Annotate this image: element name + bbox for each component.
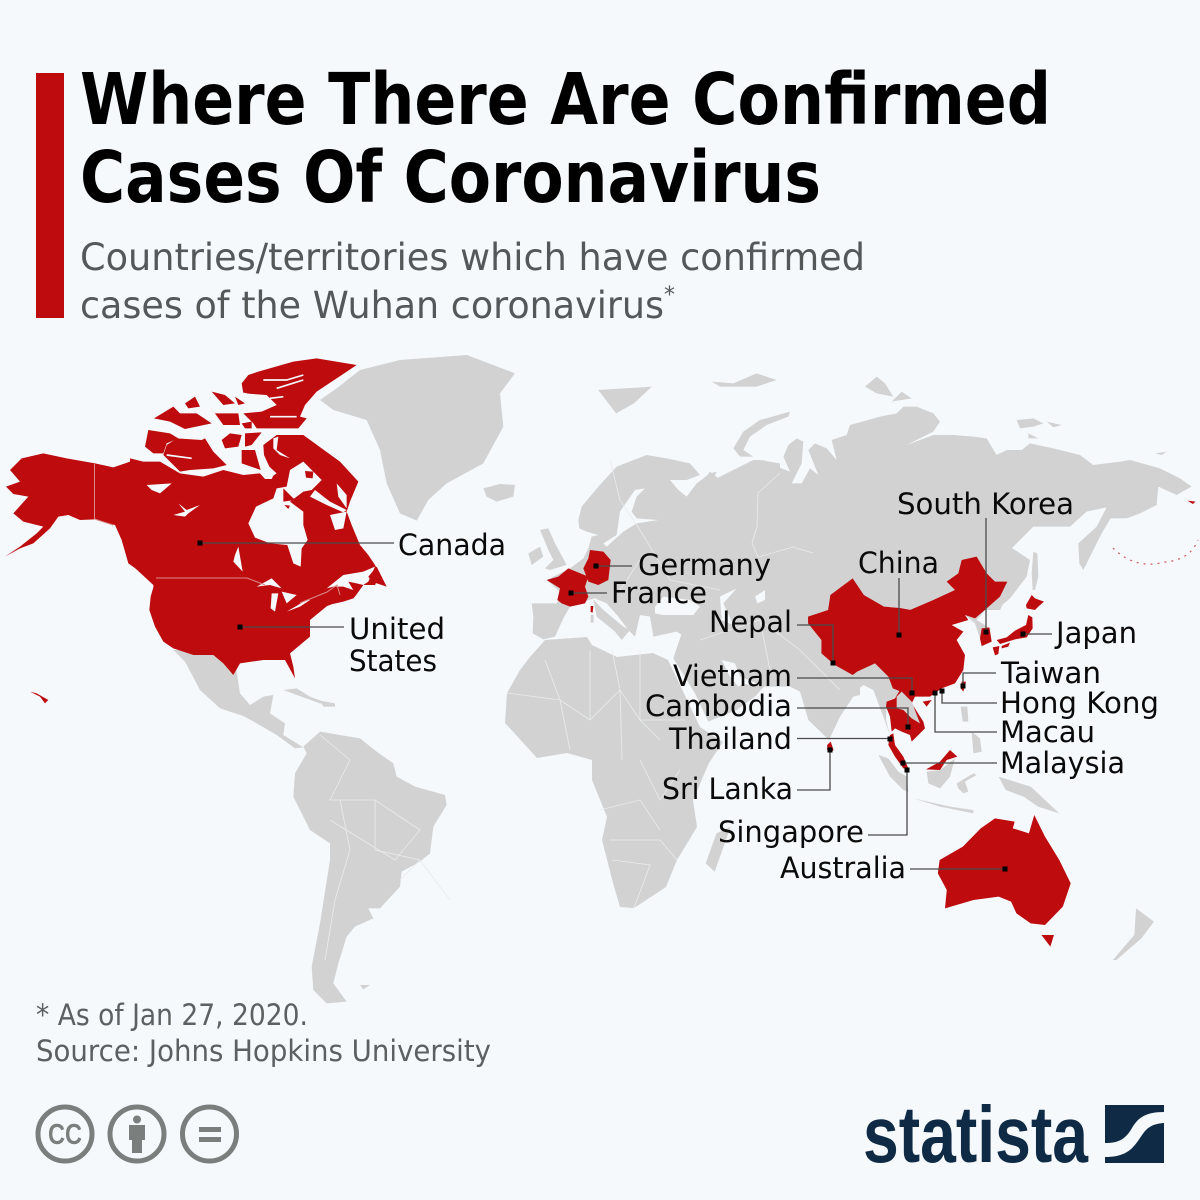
logo: statista: statista <box>863 1090 1088 1179</box>
label: United States: United <box>349 612 445 646</box>
label: Vietnam: Vietnam <box>673 659 792 693</box>
country borders <box>320 460 840 960</box>
lakes and gulfs of Canada <box>147 375 387 612</box>
footnote and source: Source: Johns Hopkins University <box>36 1034 491 1068</box>
label: South Korea <box>897 487 1074 634</box>
subtitle <box>80 236 865 327</box>
label: Vietnam <box>673 659 914 696</box>
highlighted: Sri Lanka and Australia <box>827 742 1071 947</box>
land: Myanmar and mainland Southeast Asia <box>840 660 982 813</box>
label: Australia <box>780 851 1008 885</box>
land: Russia <box>700 373 1192 610</box>
label: China: China <box>858 546 939 580</box>
label: France: France <box>611 576 707 610</box>
label: United States: States <box>349 644 437 678</box>
highlighted: France, Germany, Corsica <box>547 550 611 613</box>
label: Hong Kong: Hong Kong <box>1000 686 1159 720</box>
label: Thailand: Thailand <box>668 722 792 756</box>
highlighted: Indochina, Malaysia, Hainan <box>886 688 957 770</box>
footnote and source: * As of Jan 27, 2020. <box>36 998 308 1032</box>
icon: no derivatives <box>182 1107 236 1161</box>
land: Mexico and Central America <box>173 650 335 748</box>
label: Macau: Macau <box>1000 715 1095 749</box>
label: Cambodia <box>645 689 910 730</box>
label: China <box>858 546 939 638</box>
label: Taiwan: Taiwan <box>1000 656 1101 690</box>
label: United States <box>238 612 445 678</box>
label: Canada <box>198 528 506 562</box>
highlighted: Alaska and United States <box>5 453 367 703</box>
land: Northeast Asia, Korea, Sakhalin <box>900 540 1038 647</box>
label: Singapore: Singapore <box>718 815 864 849</box>
label: Cambodia: Cambodia <box>645 689 792 723</box>
highlighted: China west <box>808 501 1196 697</box>
title: Where There Are Confirmed <box>80 58 1051 141</box>
subtitle: Countries/territories which have confirmed <box>80 236 865 279</box>
seas: Baltic, Black, Caspian, Aral <box>603 488 765 625</box>
label: France <box>568 576 707 610</box>
highlighted: Hudson Bay islands and Newfoundland <box>283 471 387 587</box>
label: Sri Lanka <box>662 748 832 806</box>
land: Madagascar, New Guinea, New Zealand <box>706 777 1154 960</box>
US and Canada border lines <box>94 464 340 603</box>
label: Australia: Australia <box>780 851 906 885</box>
subtitle: * <box>664 283 675 308</box>
label: Malaysia <box>900 746 1125 780</box>
subtitle: cases of the Wuhan coronavirus <box>80 284 664 327</box>
land: Africa <box>505 637 723 908</box>
label: Thailand <box>668 722 892 756</box>
label: Macau <box>932 690 1095 749</box>
highlighted: China east, Korea, Japan, Taiwan <box>900 557 1044 707</box>
land: Middle East, Central Asia and India <box>640 580 860 740</box>
label: Japan: Japan <box>1054 616 1137 650</box>
highlighted: Canada <box>130 358 380 612</box>
land: Europe <box>528 455 780 660</box>
label: Sri Lanka: Sri Lanka <box>662 772 793 806</box>
icon: attribution <box>110 1107 164 1161</box>
label: Canada: Canada <box>398 528 506 562</box>
land: Svalbard <box>598 387 652 413</box>
sea: Persian Gulf <box>722 660 757 687</box>
land: Laos <box>897 692 920 723</box>
world map <box>5 355 1198 1003</box>
icon: creative commons: CC <box>48 1119 82 1151</box>
label: South Korea: South Korea <box>897 487 1074 521</box>
label: Nepal <box>709 605 836 666</box>
label: Germany: Germany <box>638 548 771 582</box>
land: Greenland and Iceland <box>320 355 515 521</box>
title <box>80 58 1051 219</box>
accent bar <box>36 73 64 318</box>
label: Japan <box>1020 616 1137 650</box>
highlighted: Aleutian islands fragment <box>1113 540 1198 564</box>
label: Singapore <box>718 768 910 849</box>
label: Malaysia: Malaysia <box>1000 746 1125 780</box>
title: Cases Of Coronavirus <box>80 136 821 219</box>
land: South America <box>293 732 447 1003</box>
footnote and source <box>36 998 491 1068</box>
icon: creative commons <box>38 1107 92 1161</box>
label: Nepal: Nepal <box>709 605 792 639</box>
